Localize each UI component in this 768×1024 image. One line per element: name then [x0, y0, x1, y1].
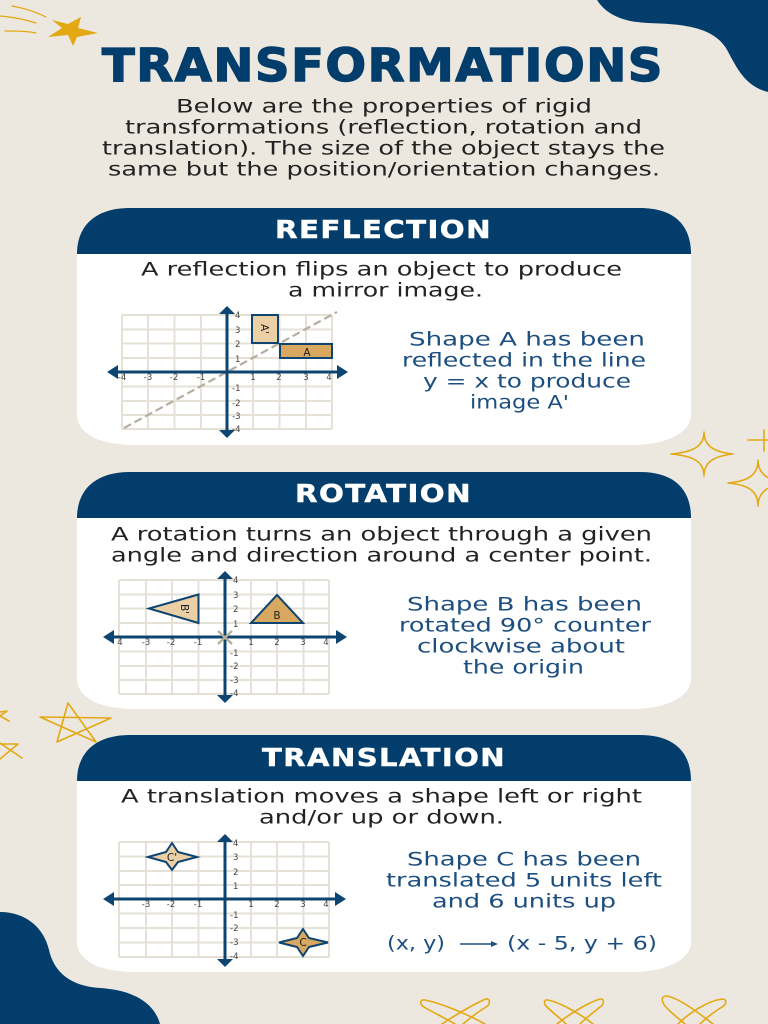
title: TRANSFORMATIONS: [102, 39, 664, 92]
tick labels: 2: [233, 605, 238, 615]
shape B: B: [273, 610, 281, 622]
rotation note: [399, 595, 652, 679]
tick labels: 2: [276, 373, 282, 383]
shape A prime: [252, 315, 278, 343]
tick labels: 1: [233, 882, 238, 892]
tick labels: 2: [235, 340, 240, 350]
tick labels: 2: [274, 900, 280, 910]
panel: translation: [77, 735, 691, 972]
tick labels: -1: [230, 649, 238, 659]
reflection chart: [107, 306, 348, 438]
shape A: [280, 344, 332, 359]
panel: rotation: [77, 472, 691, 709]
tick labels: -2: [232, 399, 240, 409]
rotation note: clockwise about: [417, 637, 625, 658]
tick labels: 3: [300, 900, 306, 910]
rotation header: [77, 472, 691, 518]
tick labels: 4: [323, 900, 329, 910]
tick labels: -4: [118, 373, 126, 383]
translation note: Shape C has been: [407, 850, 641, 871]
tick labels: -1: [197, 373, 205, 383]
axes: [107, 306, 348, 438]
tick labels: [118, 311, 332, 435]
tick labels: 1: [233, 620, 238, 630]
intro text: Below are the properties of rigid: [176, 97, 592, 118]
icon: outlined stars left: [0, 703, 111, 759]
tick labels: -1: [194, 900, 202, 910]
tick labels: -1: [232, 384, 240, 394]
reflection heading: REFLECTION: [275, 215, 492, 244]
axes: [103, 571, 347, 703]
icon: sparkle stars right: [671, 430, 768, 506]
shape C: [279, 929, 328, 956]
translation note: [386, 850, 662, 913]
reflection note: image A': [470, 393, 569, 414]
tick labels: 1: [235, 355, 240, 365]
rotation description: angle and direction around a center point.: [111, 546, 652, 567]
tick labels: -3: [230, 676, 238, 686]
translation header: [77, 735, 691, 781]
tick labels: 1: [248, 900, 254, 910]
reflection description: a mirror image.: [288, 281, 483, 302]
tick labels: -4: [230, 689, 238, 699]
rotation heading: ROTATION: [295, 479, 472, 508]
tick labels: 4: [326, 373, 332, 383]
reflection note: [402, 330, 646, 414]
rotation description: [111, 525, 652, 567]
translation chart: [103, 834, 346, 967]
tick labels: 3: [235, 326, 240, 336]
tick labels: 2: [233, 868, 238, 878]
reflection header: [77, 208, 691, 254]
line of reflection: [124, 312, 337, 428]
intro text: transformations (reflection, rotation and: [125, 118, 642, 139]
translation formula: (x, y): [387, 934, 445, 955]
axes: [103, 834, 346, 967]
translation formula: [387, 934, 657, 955]
tick labels: 3: [233, 591, 238, 601]
tick labels: 4: [233, 839, 238, 849]
tick labels: -3: [142, 638, 150, 648]
shape C prime: C': [167, 852, 177, 864]
intro text: same but the position/orientation changes.: [108, 160, 660, 181]
translation heading: TRANSLATION: [262, 743, 506, 772]
translation description: and/or up or down.: [259, 808, 504, 829]
tick labels: -1: [230, 911, 238, 921]
rotation note: the origin: [463, 658, 584, 679]
tick labels: 4: [117, 638, 123, 648]
rotation note: rotated 90° counter: [399, 616, 652, 637]
reflection note: Shape A has been: [409, 330, 645, 351]
tick labels: 4: [235, 311, 240, 321]
intro text: translation). The size of the object stays the: [102, 139, 665, 160]
tick labels: -3: [232, 412, 240, 422]
tick labels: 4: [233, 576, 238, 586]
tick labels: -2: [230, 662, 238, 672]
reflection note: reflected in the line: [402, 351, 646, 372]
translation description: A translation moves a shape left or right: [121, 787, 642, 808]
translation note: and 6 units up: [432, 892, 616, 913]
shape C prime: [148, 843, 197, 870]
shape B: [251, 595, 303, 623]
reflection note: y = x to produce: [423, 372, 631, 393]
tick labels: -2: [170, 373, 178, 383]
tick labels: 3: [303, 373, 309, 383]
blob: bottom left: [0, 912, 160, 1024]
translation description: [121, 787, 642, 829]
rotation note: Shape B has been: [407, 595, 642, 616]
icon: shooting star: [0, 6, 98, 46]
tick labels: 4: [323, 638, 329, 648]
tick labels: 3: [233, 853, 238, 863]
tick labels: [142, 839, 329, 962]
tick labels: -2: [167, 638, 175, 648]
blob: top right: [597, 0, 768, 92]
tick labels: -3: [142, 900, 150, 910]
shape C: C: [299, 937, 307, 949]
rotation description: A rotation turns an object through a given: [111, 525, 652, 546]
tick labels: 3: [300, 638, 306, 648]
translation formula: (x - 5, y + 6): [507, 934, 657, 955]
center point marker: [218, 631, 232, 644]
reflection description: A reflection flips an object to produce: [141, 260, 622, 281]
shape A: A: [303, 347, 311, 359]
tick labels: [117, 576, 329, 699]
shape A prime: A': [258, 324, 270, 334]
tick labels: 2: [274, 638, 280, 648]
translation note: translated 5 units left: [386, 871, 662, 892]
panel: reflection: [77, 208, 691, 445]
tick labels: -2: [167, 900, 175, 910]
reflection description: [141, 260, 622, 302]
rotation chart: [103, 571, 347, 703]
tick labels: -3: [144, 373, 152, 383]
tick labels: -1: [194, 638, 202, 648]
tick labels: -2: [230, 924, 238, 934]
arrow: [460, 941, 498, 947]
tick labels: -4: [230, 952, 238, 962]
tick labels: -3: [230, 938, 238, 948]
tick labels: 1: [248, 638, 254, 648]
tick labels: 1: [250, 373, 256, 383]
shape B prime: [149, 594, 198, 623]
intro text: [102, 97, 665, 181]
icon: gold loops bottom: [421, 996, 726, 1024]
tick labels: -4: [232, 425, 240, 435]
shape B prime: B': [178, 604, 190, 614]
